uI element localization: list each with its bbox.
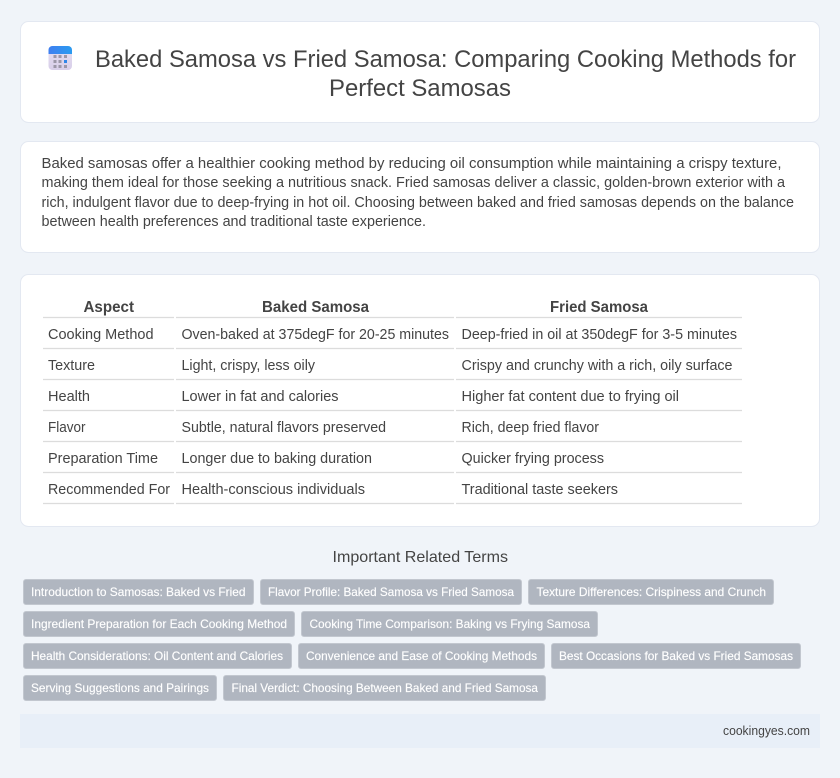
tag: convenience: [298, 644, 544, 668]
tag list: related terms: [24, 580, 800, 700]
heading: important related terms: Important Related Terms: [332, 549, 508, 566]
table row: cooking method: Oven-baked at 375degF for 20-25 minutes: [182, 327, 449, 343]
tag: texture differences: Texture Differences: Crispiness and Crunch: [536, 585, 766, 599]
title: [95, 46, 796, 102]
table row: texture: Light, crispy, less oily: [182, 358, 316, 374]
table row: preparation time: Longer due to baking duration: [182, 451, 372, 467]
tag: health considerations: Health Considerations: Oil Content and Calories: [31, 649, 283, 663]
table row: recommended for: Health-conscious individuals: [182, 482, 365, 498]
table header: [84, 299, 648, 316]
table row: flavor: [48, 420, 599, 436]
tag: cooking time: Cooking Time Comparison: Baking vs Frying Samosa: [310, 617, 590, 631]
table row: texture: [48, 358, 732, 374]
table row: cooking method: [48, 327, 737, 343]
tag: texture differences: [528, 580, 774, 604]
tag: ingredient preparation: Ingredient Preparation for Each Cooking Method: [31, 617, 287, 631]
tag: ingredient preparation: [24, 612, 294, 636]
title: Baked Samosa vs Fried Samosa: Comparing Cooking Methods for: [95, 46, 796, 73]
table row: flavor: Flavor: [48, 420, 86, 436]
table row: preparation time: Quicker frying process: [462, 451, 604, 467]
table row: flavor: Rich, deep fried flavor: [462, 420, 599, 436]
table row: recommended for: Recommended For: [48, 482, 170, 498]
table row: health: Lower in fat and calories: [182, 389, 338, 405]
tag: flavor profile: Flavor Profile: Baked Samosa vs Fried Samosa: [268, 585, 514, 599]
tag: serving suggestions: Serving Suggestions and Pairings: [31, 681, 209, 695]
table row: health: Health: [48, 389, 90, 405]
tag: serving suggestions: [24, 676, 216, 700]
tag: cooking time: [302, 612, 598, 636]
tag: flavor profile: [260, 580, 522, 604]
table header: Baked Samosa: [262, 299, 369, 316]
icon: calendar: [48, 46, 72, 70]
table row: texture: Crispy and crunchy with a rich, oily surface: [462, 358, 732, 374]
table row: recommended for: [48, 482, 618, 498]
panel: comparison table: [20, 274, 820, 526]
table row: flavor: Subtle, natural flavors preserved: [182, 420, 386, 436]
table row: preparation time: [48, 451, 604, 467]
table row: cooking method: Deep-fried in oil at 350degF for 3-5 minutes: [462, 327, 737, 343]
tag: introduction: Introduction to Samosas: Baked vs Fried: [31, 585, 246, 599]
table row: health: Higher fat content due to frying oil: [462, 389, 679, 405]
table row: recommended for: Traditional taste seekers: [462, 482, 618, 498]
table header: Aspect: [84, 299, 135, 316]
title: Perfect Samosas: [329, 75, 511, 102]
tag: final verdict: Final Verdict: Choosing Between Baked and Fried Samosa: [232, 681, 538, 695]
text block: introduction paragraph: Baked samosas offer a healthier cooking method by reducing oil consumption while maintaining a crispy texture,: [42, 156, 782, 172]
text block: introduction paragraph: [42, 156, 794, 230]
table header: Fried Samosa: [550, 299, 648, 316]
text block: introduction paragraph: between health preferences and traditional taste experience.: [42, 214, 426, 230]
text block: introduction paragraph: making them ideal for those seeking a nutritious snack. Fried samosas deliver a classic, golden-brown exterior with a: [42, 175, 785, 191]
tag: final verdict: [224, 676, 546, 700]
footer: cookingyes.com: [723, 723, 810, 738]
tag: convenience: Convenience and Ease of Cooking Methods: [306, 649, 537, 663]
tag: introduction: [24, 580, 254, 604]
footer: [20, 714, 820, 748]
tag: best occasions: Best Occasions for Baked vs Fried Samosas: [559, 649, 793, 663]
table row: health: [48, 389, 679, 405]
text block: introduction paragraph: rich, indulgent flavor due to deep-frying in hot oil. Choosing between baked and fried samosas depends on the balance: [42, 195, 794, 211]
panel: introduction: [20, 142, 820, 252]
tag: best occasions: [552, 644, 800, 668]
table row: texture: Texture: [48, 358, 95, 374]
tag: health considerations: [24, 644, 292, 668]
table row: cooking method: Cooking Method: [48, 327, 154, 343]
panel: title header: [20, 22, 820, 122]
table row: preparation time: Preparation Time: [48, 451, 158, 467]
